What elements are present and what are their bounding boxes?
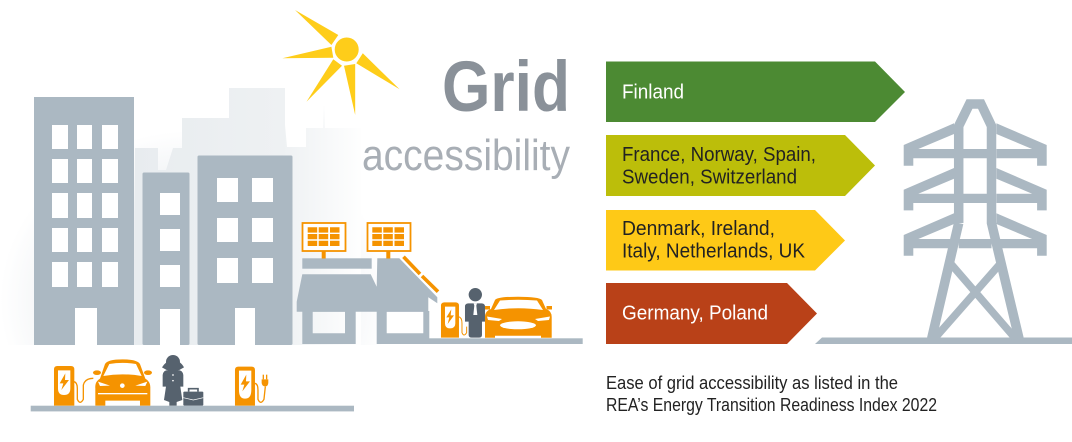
arrow: Finland — [606, 62, 905, 122]
caption — [606, 373, 937, 415]
arrow: Finland: Finland — [622, 82, 684, 104]
charger: right street — [441, 302, 467, 338]
solar panel: left — [302, 223, 346, 258]
caption: REA’s Energy Transition Readiness Index 2022 — [606, 395, 937, 415]
background glow — [0, 90, 400, 345]
ground: right street — [429, 338, 583, 344]
pylon — [815, 104, 1072, 344]
building: narrow middle — [142, 172, 190, 345]
solar panel: right — [368, 223, 410, 258]
car: lower left — [93, 359, 152, 406]
building: tall left — [34, 97, 134, 345]
arrow: Denmark, Ireland, Italy, Netherlands, UK: Denmark, Ireland, — [622, 218, 775, 240]
arrow: France, Norway, Spain, Sweden, Switzerland: Sweden, Switzerland — [622, 166, 797, 188]
ground: lower street — [31, 406, 354, 411]
background skyline — [135, 88, 361, 345]
arrow: Denmark, Ireland, Italy, Netherlands, UK — [606, 210, 845, 270]
briefcase — [183, 389, 203, 406]
person: businesswoman — [162, 355, 184, 406]
title: Grid — [442, 48, 570, 127]
charger: lower left — [54, 366, 93, 406]
solar panel: on roof — [404, 257, 438, 292]
sun icon — [282, 10, 400, 115]
arrow: France, Norway, Spain, Sweden, Switzerland — [606, 135, 875, 196]
title — [362, 48, 570, 180]
caption: Ease of grid accessibility as listed in the — [606, 373, 898, 393]
arrow: France, Norway, Spain, Sweden, Switzerland: France, Norway, Spain, — [622, 144, 816, 166]
arrow: Germany, Poland: Germany, Poland — [622, 302, 768, 324]
houses — [297, 258, 437, 344]
person: businessman — [465, 288, 485, 338]
car: right street — [485, 297, 552, 338]
title: accessibility — [362, 131, 570, 180]
building: wide right — [198, 156, 292, 345]
arrow: Germany, Poland — [606, 283, 817, 344]
charger with plug: lower middle — [235, 367, 268, 406]
arrow: Denmark, Ireland, Italy, Netherlands, UK: Italy, Netherlands, UK — [622, 240, 806, 262]
